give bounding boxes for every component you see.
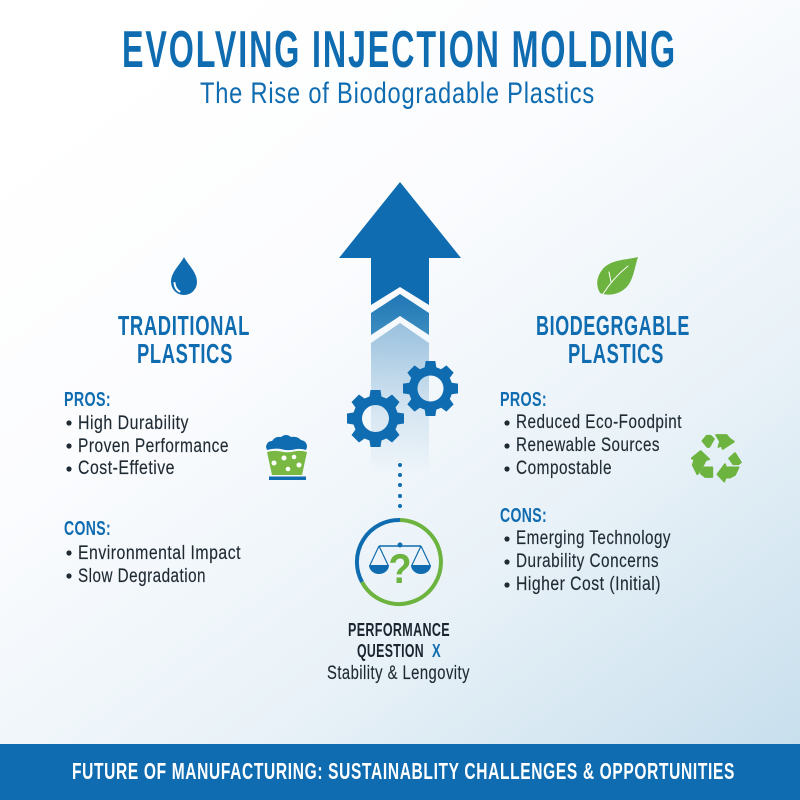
central arrow [339, 182, 461, 475]
panel: biodegradable cons: Durability Concerns [516, 551, 659, 572]
heading: traditional plastics [118, 310, 250, 369]
panel: biodegradable pros: Compostable [516, 458, 612, 479]
panel: traditional cons: Slow Degradation [78, 566, 206, 587]
label: performance question: QUESTION [357, 641, 424, 661]
label: performance question: PERFORMANCE [348, 620, 450, 640]
subtitle: The Rise of Biodogradable Plastics [200, 77, 595, 110]
panel: traditional pros: Cost-Effetive [78, 458, 175, 479]
icon: balance scale with question mark [357, 520, 441, 604]
panel: biodegradable pros [500, 389, 682, 479]
label: performance question: X [432, 641, 441, 661]
icon: balance scale with question mark: ? [388, 545, 412, 592]
panel: biodegradable cons: CONS: [500, 505, 547, 527]
heading: traditional plastics: PLASTICS [137, 338, 233, 369]
dotted connector [398, 463, 402, 508]
footer banner [0, 744, 800, 800]
panel: biodegradable pros: Renewable Sources [516, 435, 660, 456]
panel: traditional pros: High Durability [78, 413, 189, 434]
label: performance question [327, 620, 470, 684]
icon: leaf [597, 257, 638, 295]
panel: traditional cons: CONS: [64, 518, 111, 540]
panel: biodegradable cons: Emerging Technology [516, 528, 671, 549]
panel: biodegradable cons [500, 505, 671, 595]
panel: traditional cons [64, 518, 241, 587]
panel: traditional pros: PROS: [64, 389, 111, 411]
heading: biodegradable plastics [536, 310, 690, 369]
panel: traditional pros: Proven Performance [78, 436, 229, 457]
panel: traditional cons: Environmental Impact [78, 543, 241, 564]
panel: traditional pros [64, 389, 229, 479]
panel: biodegradable pros: PROS: [500, 389, 547, 411]
heading: biodegradable plastics: BIODEGRGABLE [536, 310, 690, 341]
label: performance question: Stability & Lengovity [327, 663, 470, 684]
heading: traditional plastics: TRADITIONAL [118, 310, 250, 341]
heading: biodegradable plastics: PLASTICS [568, 338, 664, 369]
icon: recycle [692, 435, 741, 482]
panel: biodegradable cons: Higher Cost (Initial) [516, 574, 661, 595]
panel: biodegradable pros: Reduced Eco-Foodpint [516, 412, 682, 433]
icon: water drop [171, 257, 197, 295]
icon: plastic tub [266, 435, 307, 480]
icon: gears [347, 361, 458, 447]
